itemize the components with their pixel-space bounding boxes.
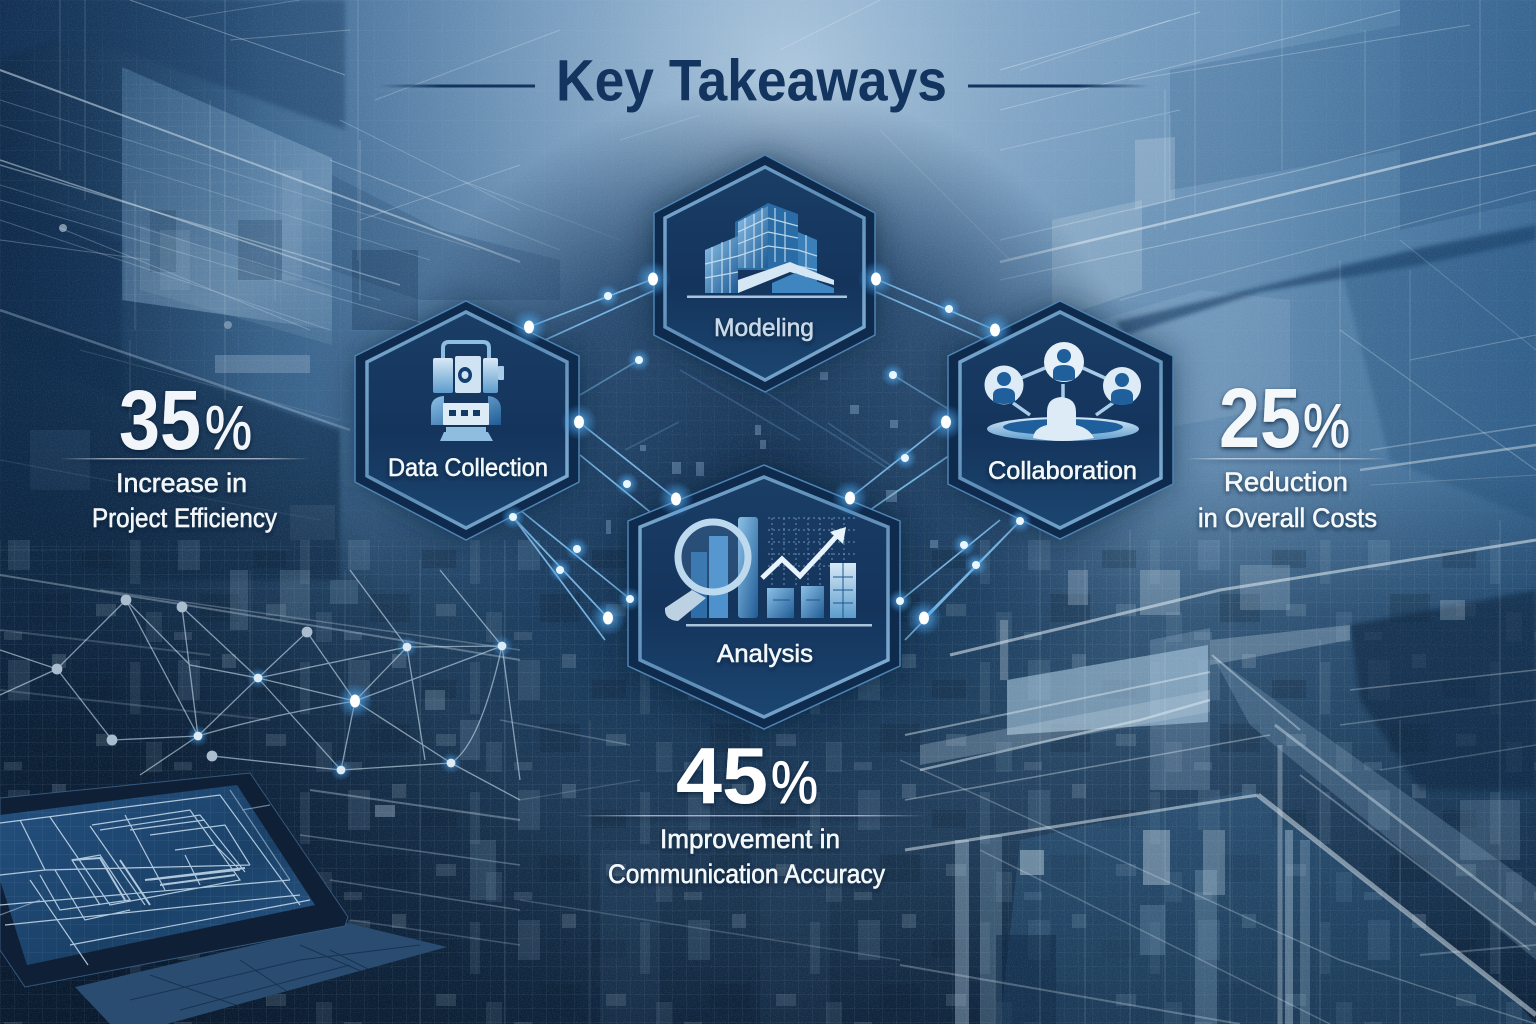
divider xyxy=(575,815,925,816)
hexagon inner panel xyxy=(640,477,888,717)
title rule left xyxy=(378,84,535,88)
value: % xyxy=(1303,392,1350,461)
connectors between hexagons xyxy=(513,279,1020,640)
hexagon frame xyxy=(628,465,900,729)
caption xyxy=(608,824,885,889)
label: Collaboration xyxy=(988,457,1137,485)
caption: Project Efficiency xyxy=(92,503,277,533)
window speckle texture xyxy=(0,540,1536,1024)
hexagon: Data Collection xyxy=(355,301,579,540)
caption: Communication Accuracy xyxy=(608,859,885,889)
hexagon frame xyxy=(948,301,1173,539)
tablet screen xyxy=(0,785,315,965)
stat: 45% Improvement in Communication Accuracy xyxy=(575,731,925,889)
value: % xyxy=(771,749,818,816)
glowing nodes on hexagon edges xyxy=(501,261,1032,636)
tablet bezel xyxy=(0,773,348,987)
hexagon frame xyxy=(355,301,579,540)
top-centre sweeping lines xyxy=(340,0,1180,300)
title xyxy=(378,48,1150,114)
hexagon inner panel xyxy=(665,167,864,380)
label: Analysis xyxy=(717,640,813,668)
hexagon inner panel xyxy=(367,312,567,528)
hexagon shadow xyxy=(355,301,579,540)
hexagon shadow xyxy=(948,301,1173,539)
top-right structure xyxy=(1170,25,1400,190)
value: 35 xyxy=(119,373,201,467)
stat: 35% Increase in Project Efficiency xyxy=(60,373,310,533)
hexagon shadow xyxy=(654,155,875,392)
stat: 25% Reduction in Overall Costs xyxy=(1186,371,1386,533)
value: % xyxy=(205,394,252,463)
hexagon: Analysis xyxy=(628,465,900,729)
hexagon shadow xyxy=(628,465,900,729)
blueprint drawing xyxy=(0,790,310,965)
title rule right xyxy=(968,84,1150,88)
icon: magnifier with growth chart xyxy=(665,517,872,626)
hexagon frame xyxy=(654,155,875,392)
connector lines xyxy=(513,279,1020,640)
network graph: lower left xyxy=(0,570,520,800)
left diagonal streaks xyxy=(0,0,560,550)
divider xyxy=(1186,458,1386,459)
value: 45 xyxy=(676,731,768,820)
paper plan under tablet xyxy=(75,923,447,1024)
divider xyxy=(60,458,310,459)
left glass building face xyxy=(122,67,332,330)
tablet with blueprint xyxy=(0,773,447,1024)
top-left dark tower mass xyxy=(0,0,345,130)
caption: Increase in xyxy=(116,468,247,498)
caption xyxy=(1198,467,1377,533)
caption: Reduction xyxy=(1224,467,1348,497)
caption xyxy=(92,468,277,533)
icon: office buildings xyxy=(687,203,847,298)
hexagon inner panel xyxy=(960,312,1161,528)
icon: total station surveying instrument xyxy=(431,342,504,441)
icon: connected people xyxy=(984,342,1141,441)
scattered data squares xyxy=(563,370,938,548)
hexagon: Collaboration xyxy=(948,301,1173,539)
hexagon: Modeling xyxy=(654,155,875,392)
lower-left blueprint streaks xyxy=(0,540,900,1024)
label: Modeling xyxy=(714,314,814,342)
value xyxy=(676,731,818,820)
label: Data Collection xyxy=(388,454,548,482)
value: 25 xyxy=(1219,371,1301,465)
title text: Key Takeaways xyxy=(556,48,947,114)
caption: Improvement in xyxy=(660,824,840,854)
lower-right building xyxy=(1350,590,1536,790)
caption: in Overall Costs xyxy=(1198,503,1377,533)
